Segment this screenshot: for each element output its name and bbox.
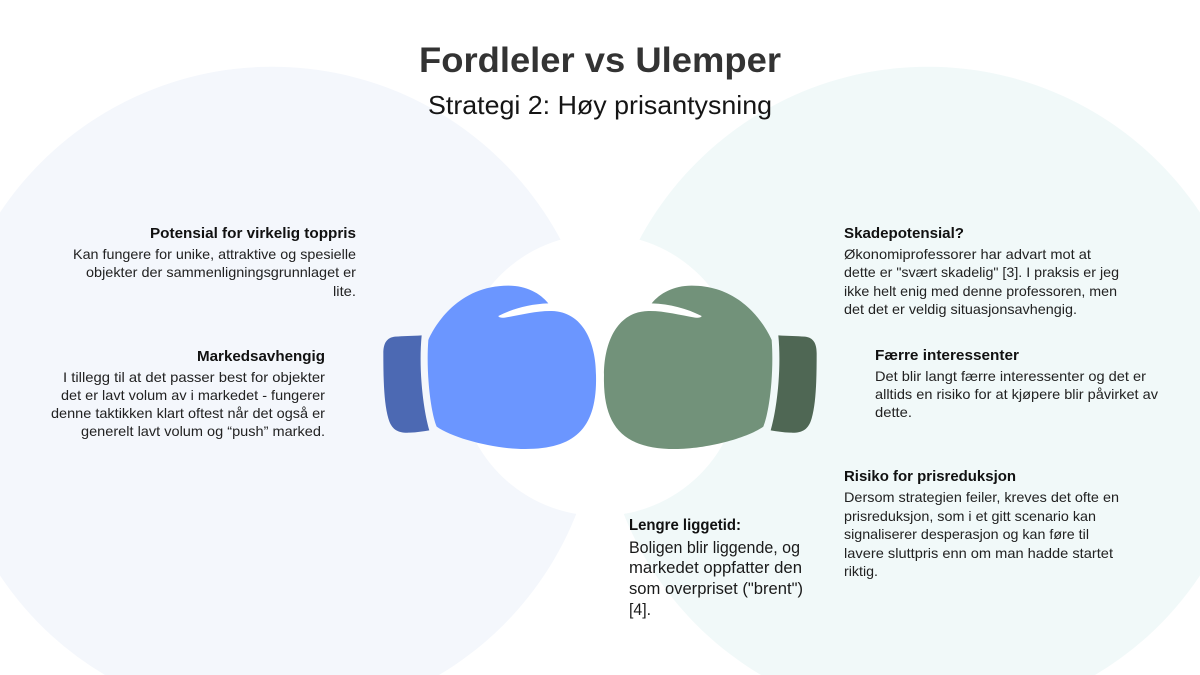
text block: Skadepotensial?: Økonomiprofessorer har advart mot at — [844, 246, 1091, 262]
text block: Potensial for virkelig toppris — [73, 225, 356, 299]
text block: Markedsavhengig: generelt lavt volum og “push” marked. — [81, 423, 325, 439]
text block: Skadepotensial? — [844, 225, 1119, 317]
text block: Risiko for prisreduksjon: Risiko for prisreduksjon — [844, 468, 1016, 485]
text block: Potensial for virkelig toppris: objekter der sammenligningsgrunnlaget er — [86, 264, 356, 280]
text block: Skadepotensial?: dette er "svært skadelig" [3]. I praksis er jeg — [844, 264, 1119, 280]
text block: Skadepotensial?: Skadepotensial? — [844, 225, 964, 242]
icon: blue boxing glove — [383, 286, 596, 449]
panel: left background circle — [0, 67, 599, 675]
text block: Risiko for prisreduksjon: signaliserer desperasjon og kan føre til — [844, 526, 1089, 542]
text block: Færre interessenter: Færre interessenter — [875, 347, 1019, 364]
text block: Potensial for virkelig toppris: lite. — [333, 283, 356, 299]
text block: Risiko for prisreduksjon: riktig. — [844, 563, 878, 579]
blue glove body — [428, 286, 596, 449]
text block: Færre interessenter: alltids en risiko for at kjøpere blir påvirket av — [875, 386, 1158, 402]
panel: right background circle — [601, 67, 1200, 675]
text block: Potensial for virkelig toppris: Kan fungere for unike, attraktive og spesielle — [73, 246, 356, 262]
text block: Potensial for virkelig toppris: Potensial for virkelig toppris — [150, 225, 356, 242]
text block: Lengre liggetid: Boligen blir liggende, og — [629, 539, 800, 557]
subtitle: Strategi 2: Høy prisantysning — [428, 90, 772, 120]
text block: Færre interessenter: Det blir langt færre interessenter og det er — [875, 368, 1146, 384]
text block: Færre interessenter: dette. — [875, 404, 912, 420]
green glove wrist cuff — [771, 335, 817, 433]
green glove body — [604, 286, 772, 449]
text block: Risiko for prisreduksjon: Dersom strategien feiler, kreves det ofte en — [844, 489, 1119, 505]
text block: Risiko for prisreduksjon — [844, 468, 1119, 579]
text block: Lengre liggetid: Lengre liggetid: — [629, 517, 741, 534]
text block: Markedsavhengig: denne taktikken klart oftest når det også er — [51, 405, 325, 421]
text block: Lengre liggetid — [629, 517, 803, 619]
text block: Markedsavhengig: det er lavt volum av i markedet - fungerer — [61, 387, 325, 403]
text block: Lengre liggetid: som overpriset ("brent") — [629, 580, 803, 598]
icon: green boxing glove — [604, 286, 817, 449]
text block: Lengre liggetid: markedet oppfatter den — [629, 559, 802, 577]
text block: Markedsavhengig: I tillegg til at det passer best for objekter — [63, 369, 325, 385]
text block: Risiko for prisreduksjon: prisreduksjon, som i et gitt scenario kan — [844, 508, 1096, 524]
text block: Skadepotensial?: det det er veldig situasjonsavhengig. — [844, 301, 1077, 317]
text block: Færre interessenter — [875, 347, 1158, 420]
text block: Risiko for prisreduksjon: lavere sluttpris enn om man hadde startet — [844, 545, 1113, 561]
text block: Skadepotensial?: ikke helt enig med denne professoren, men — [844, 283, 1117, 299]
text block: Markedsavhengig: Markedsavhengig — [197, 348, 325, 365]
text block: Lengre liggetid: [4]. — [629, 601, 651, 619]
title: Fordleler vs Ulemper — [419, 41, 781, 80]
panel: central white circle — [459, 234, 741, 516]
blue glove wrist cuff — [383, 335, 429, 433]
text block: Markedsavhengig — [51, 348, 325, 439]
